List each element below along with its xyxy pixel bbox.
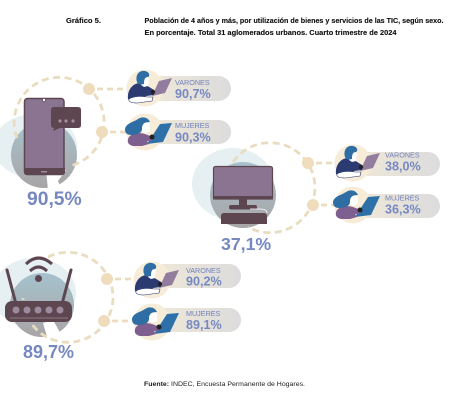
title [144, 16, 444, 37]
value: total phone: 90,5% [27, 189, 82, 210]
pill: varones phone [126, 70, 231, 106]
pill: varones router: 90,2% [186, 274, 222, 288]
panel: computer [192, 143, 440, 254]
value: total computer: 37,1% [221, 234, 271, 254]
pill: varones computer: 38,0% [385, 160, 421, 174]
chart number: Gráfico 5. [66, 16, 101, 25]
pill: varones phone: 90,7% [175, 87, 211, 101]
pill: varones router [134, 262, 241, 298]
pill: mujeres computer: 36,3% [385, 202, 421, 216]
pill: mujeres computer [333, 186, 440, 224]
icon: monitor and keyboard [213, 166, 273, 224]
pill: mujeres phone [125, 114, 231, 150]
icon: router [5, 258, 72, 322]
pill: varones phone: VARONES [175, 78, 210, 87]
pill: mujeres phone: 90,3% [175, 130, 211, 144]
pill: varones computer [334, 144, 440, 182]
connectors [302, 157, 336, 211]
title: Población de 4 años y más, por utilización de bienes y servicios de las TIC, según sexo. [144, 16, 444, 25]
connectors [83, 83, 128, 138]
pill: mujeres router [132, 304, 241, 340]
panel: mobile phone [0, 70, 231, 210]
pill: mujeres computer: MUJERES [385, 194, 420, 202]
pill: mujeres phone: MUJERES [175, 121, 210, 130]
icon: phone [24, 98, 81, 175]
title: En porcentaje. Total 31 aglomerados urbanos. Cuarto trimestre de 2024 [144, 28, 397, 37]
pill: mujeres router: MUJERES [186, 309, 221, 318]
source note: Fuente: INDEC, Encuesta Permanente de Hogares. [144, 381, 305, 388]
connectors [98, 273, 135, 327]
pill: mujeres router: 89,1% [186, 318, 222, 332]
panel: internet router [0, 252, 241, 362]
value: total router: 89,7% [23, 342, 74, 362]
pill: varones computer: VARONES [385, 150, 420, 160]
pill: varones router: VARONES [186, 266, 221, 275]
